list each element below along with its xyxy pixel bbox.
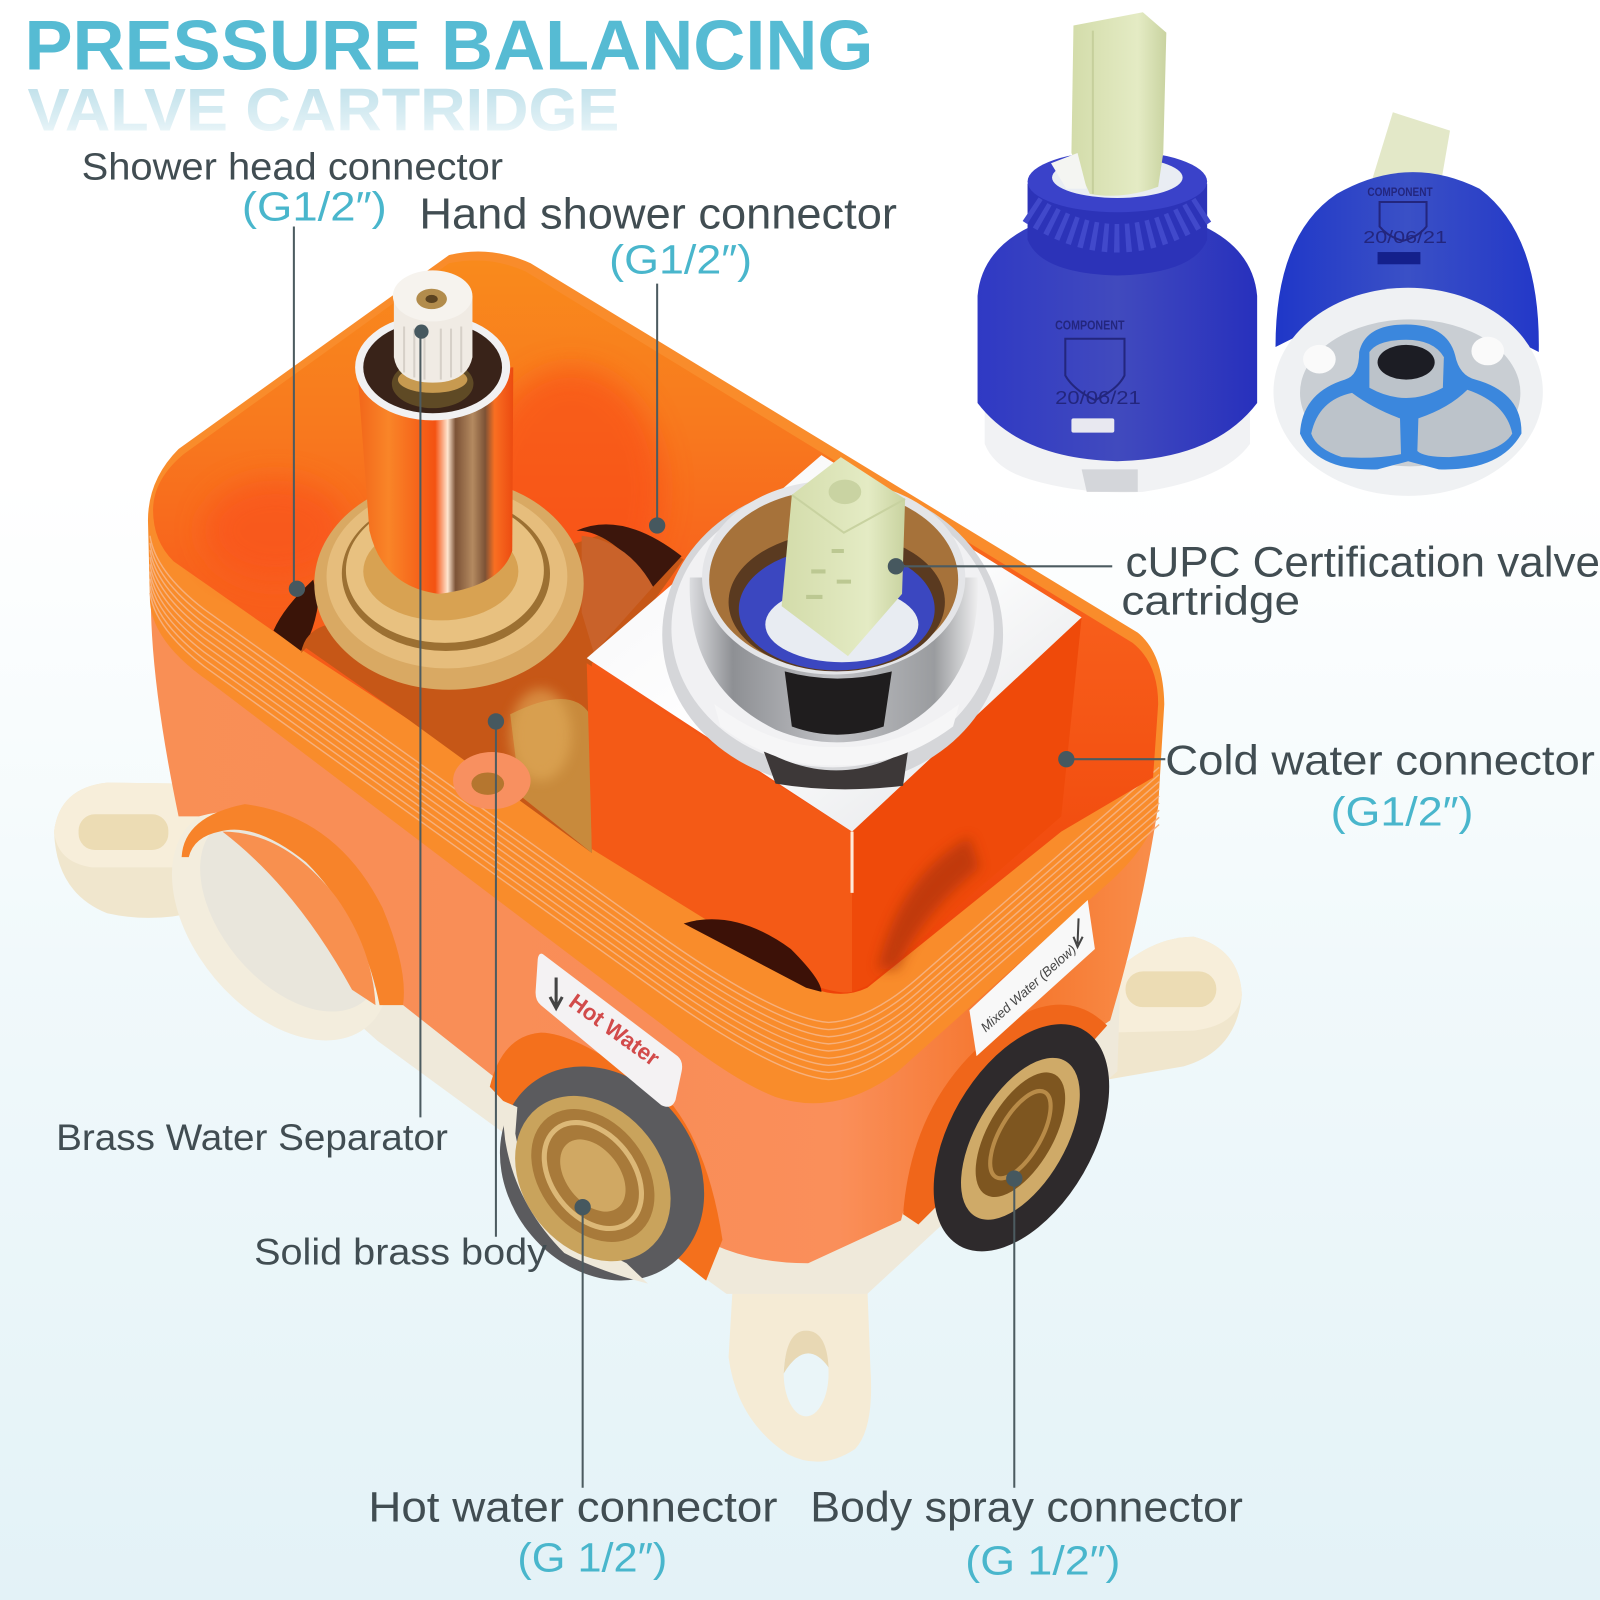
cream base [194,816,1122,1294]
callout: cold water connector [1058,736,1595,835]
cartridge body [978,227,1257,461]
white face [1273,288,1543,496]
callout: cold water connector: (G1/2″) [1331,789,1473,835]
callout: hand shower connector: Hand shower connector [419,190,897,239]
shower head port hole [273,580,318,651]
hot water port [458,1026,746,1321]
label: hot water [536,954,682,1107]
callout: hot water connector [368,1199,778,1580]
mounting ear: left [54,783,245,918]
interior left glow [204,480,347,582]
callout: shower head connector: (G1/2″) [242,183,387,229]
ribbed neck [1028,151,1207,276]
inner grey well [1300,319,1520,466]
boss insert [453,752,531,809]
callout: body spray connector: Body spray connector [810,1483,1243,1531]
certification mark: COMPONENT [1367,185,1433,199]
callout: cUPC certification valve cartridge: cartridge [1121,577,1300,623]
certification mark [1055,318,1141,433]
callout: hot water connector: (G 1/2″) [517,1534,667,1580]
title: VALVE CARTRIDGE [28,77,619,144]
guide pegs [1303,337,1504,373]
mounting ear: bottom [729,1288,871,1462]
callout: solid brass body [254,713,548,1272]
callout: shower head connector [82,146,503,597]
square trim prism [587,455,1082,993]
callout: body spray connector [810,1170,1243,1583]
certification mark [1363,185,1447,264]
label: mixed water: Mixed Water (Below) [978,942,1079,1035]
disc orange collar [182,804,404,1005]
callout: cUPC certification valve cartridge [888,539,1600,623]
callout: body spray connector: (G 1/2″) [965,1537,1120,1583]
certification mark: COMPONENT [1055,318,1124,333]
callout: cold water connector: Cold water connector [1165,736,1595,783]
certification mark: 20/06/21 [1363,227,1447,247]
product illustration: left cartridge [978,12,1257,492]
centre bore [1378,345,1435,380]
brass body casting [301,524,684,853]
box interior [153,261,1158,994]
mounting ear: right [1107,937,1242,1080]
white spindle [393,270,472,383]
top lobe [1369,340,1444,398]
chrome bezel [662,481,1003,789]
callout: hand shower connector: (G1/2″) [609,236,752,282]
brass flange [314,478,584,690]
callout: brass water separator [56,324,448,1158]
callout: brass water separator: Brass Water Separator [56,1117,448,1158]
lower left lobe [1311,393,1401,458]
cartridge body [1276,172,1539,352]
orange body [149,531,1163,1263]
label: hot water: Hot Water [564,989,664,1071]
valve stem [782,457,905,656]
label: mixed water [969,900,1095,1056]
product illustration: right cartridge [1273,112,1543,496]
lower right lobe [1417,390,1512,457]
cartridge white base [985,403,1250,492]
body spray port [897,994,1146,1281]
callout: hand shower connector [419,190,897,534]
callout: hot water connector: Hot water connector [368,1483,778,1531]
knock-out disc [128,765,433,1082]
rim ribs [150,536,1159,1080]
bottom dark hole [684,919,821,992]
blue trefoil seal [1300,324,1521,469]
interior hot glow [480,367,663,612]
callout: shower head connector: Shower head connector [82,146,503,188]
product illustration: valve box [54,251,1242,1462]
title: PRESSURE BALANCING [24,5,873,84]
certification mark: 20/06/21 [1055,387,1141,408]
stem [1051,12,1166,196]
stem [1372,112,1450,184]
base notch [1082,469,1138,492]
callout: cUPC certification valve cartridge: cUPC Certification valve [1126,539,1600,587]
callout: solid brass body: Solid brass body [254,1231,548,1272]
title [24,5,873,144]
ribbed rim [148,251,1164,1103]
chrome tube [355,314,513,594]
